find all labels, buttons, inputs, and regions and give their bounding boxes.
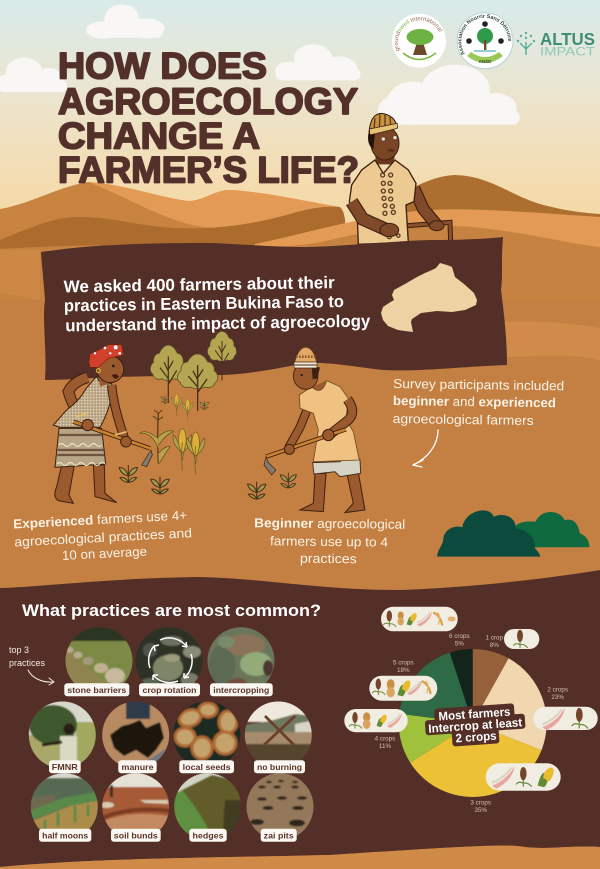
logo: Groundswell International: groundswell international — [394, 16, 444, 51]
logo: Groundswell International — [392, 14, 446, 68]
photo: intercropping — [208, 627, 274, 684]
practice labels: zai pits — [264, 832, 294, 840]
sky background — [0, 0, 600, 260]
beginner text — [254, 515, 405, 567]
pie chart: crops intercropped — [399, 649, 547, 797]
pie callout: Intercrop at least — [428, 715, 523, 736]
top 3 practices note: practices — [9, 658, 46, 668]
title: AGROECOLOGY — [58, 81, 358, 122]
sand dunes — [0, 175, 600, 600]
pie labels: 23% — [551, 694, 564, 701]
pie labels: 5 crops — [393, 660, 414, 667]
logo: ANSD: ANSD — [479, 59, 492, 64]
pie labels: 11% — [379, 743, 391, 750]
photo: zai pits — [246, 773, 314, 836]
photo: stone barriers — [66, 627, 132, 684]
experienced text: 10 on average — [62, 544, 147, 563]
arrow — [413, 430, 438, 467]
pie labels: 6 crops — [449, 633, 470, 640]
experienced text — [13, 507, 193, 565]
practice labels: local seeds — [183, 763, 231, 772]
banner text — [64, 273, 371, 335]
photo: crop rotation — [136, 627, 202, 684]
photo: local seeds — [173, 702, 240, 760]
survey text — [393, 376, 564, 428]
practice labels: half moons — [42, 832, 89, 840]
pie labels: 5% — [455, 641, 464, 648]
pie callout: 2 crops — [455, 729, 497, 745]
survey text: agroecological farmers — [393, 411, 534, 428]
bushes — [437, 510, 589, 557]
pill: 1 crop — [504, 629, 539, 649]
practice labels: no burning — [257, 763, 302, 772]
practice labels: hedges — [192, 832, 224, 840]
trees and crops — [119, 331, 237, 494]
pie labels: 1 crop — [486, 635, 504, 642]
beginner text: Beginner agroecological — [254, 515, 405, 532]
banner text: understand the impact of agroecology — [65, 312, 371, 335]
practice labels: stone barriers — [67, 686, 127, 695]
logo: ANSD: Association Nourrir Sans Détruire — [458, 14, 512, 54]
pie labels: 35% — [474, 807, 487, 814]
beginner text: farmers use up to 4 — [270, 533, 388, 550]
pie labels: 4 crops — [375, 735, 395, 742]
photo: half moons — [30, 773, 98, 830]
section heading: What practices are most common? — [22, 601, 321, 620]
beginner text: practices — [300, 551, 357, 566]
practice labels: intercropping — [213, 686, 269, 695]
top 3 practices note: top 3 — [9, 645, 29, 655]
pie callout — [424, 703, 526, 748]
logo: Altus Impact: IMPACT — [540, 44, 596, 58]
pie labels: 2 crops — [547, 686, 568, 693]
pill: 6 crops — [381, 607, 458, 631]
map: Burkina Faso — [381, 263, 477, 332]
practice labels: crop rotation — [142, 686, 196, 695]
practice labels — [39, 683, 305, 842]
farmer: experienced woman with hoe — [53, 345, 152, 503]
pie callout: Most farmers — [438, 705, 511, 724]
practice labels: manure — [122, 763, 154, 772]
top 3 practices note — [9, 645, 54, 685]
bottom sand strip — [0, 846, 600, 869]
banner — [41, 237, 507, 380]
pie labels: 18% — [397, 667, 410, 674]
survey text: Survey participants included — [393, 376, 564, 393]
bottom panel — [0, 570, 600, 867]
survey text: beginner and experienced — [393, 393, 556, 410]
farmer with plough — [349, 113, 451, 244]
title: FARMER’S LIFE? — [58, 150, 359, 190]
photo: hedges — [174, 773, 241, 835]
pill: 4 crops — [344, 709, 408, 732]
pie labels: 3 crops — [470, 799, 491, 806]
photo: no burning — [244, 702, 312, 760]
pie labels — [375, 633, 568, 814]
pill: 3 crops — [486, 763, 561, 791]
photo: soil bunds — [102, 773, 170, 830]
practice labels: FMNR — [52, 763, 78, 772]
clouds — [0, 4, 520, 127]
banner text: practices in Eastern Bukina Faso to — [64, 292, 344, 315]
no burning cross — [264, 716, 295, 745]
logo: Altus Impact — [517, 29, 596, 58]
pill: 2 crops — [533, 707, 598, 730]
pie labels: 8% — [490, 642, 499, 649]
title: CHANGE A — [58, 116, 260, 156]
logo: Altus Impact: ALTUS — [540, 29, 595, 49]
photo: manure — [102, 702, 170, 764]
banner text: We asked 400 farmers about their — [64, 273, 335, 296]
experienced text: agroecological practices and — [14, 525, 192, 549]
practice labels: soil bunds — [114, 832, 158, 840]
rotation arrows — [149, 638, 192, 683]
title — [58, 46, 359, 190]
photo: FMNR — [28, 702, 96, 766]
farmer: beginner man with hoe — [247, 347, 365, 513]
title: HOW DOES — [58, 46, 267, 86]
pill: 5 crops — [369, 676, 437, 701]
experienced text: Experienced farmers use 4+ — [13, 507, 187, 532]
